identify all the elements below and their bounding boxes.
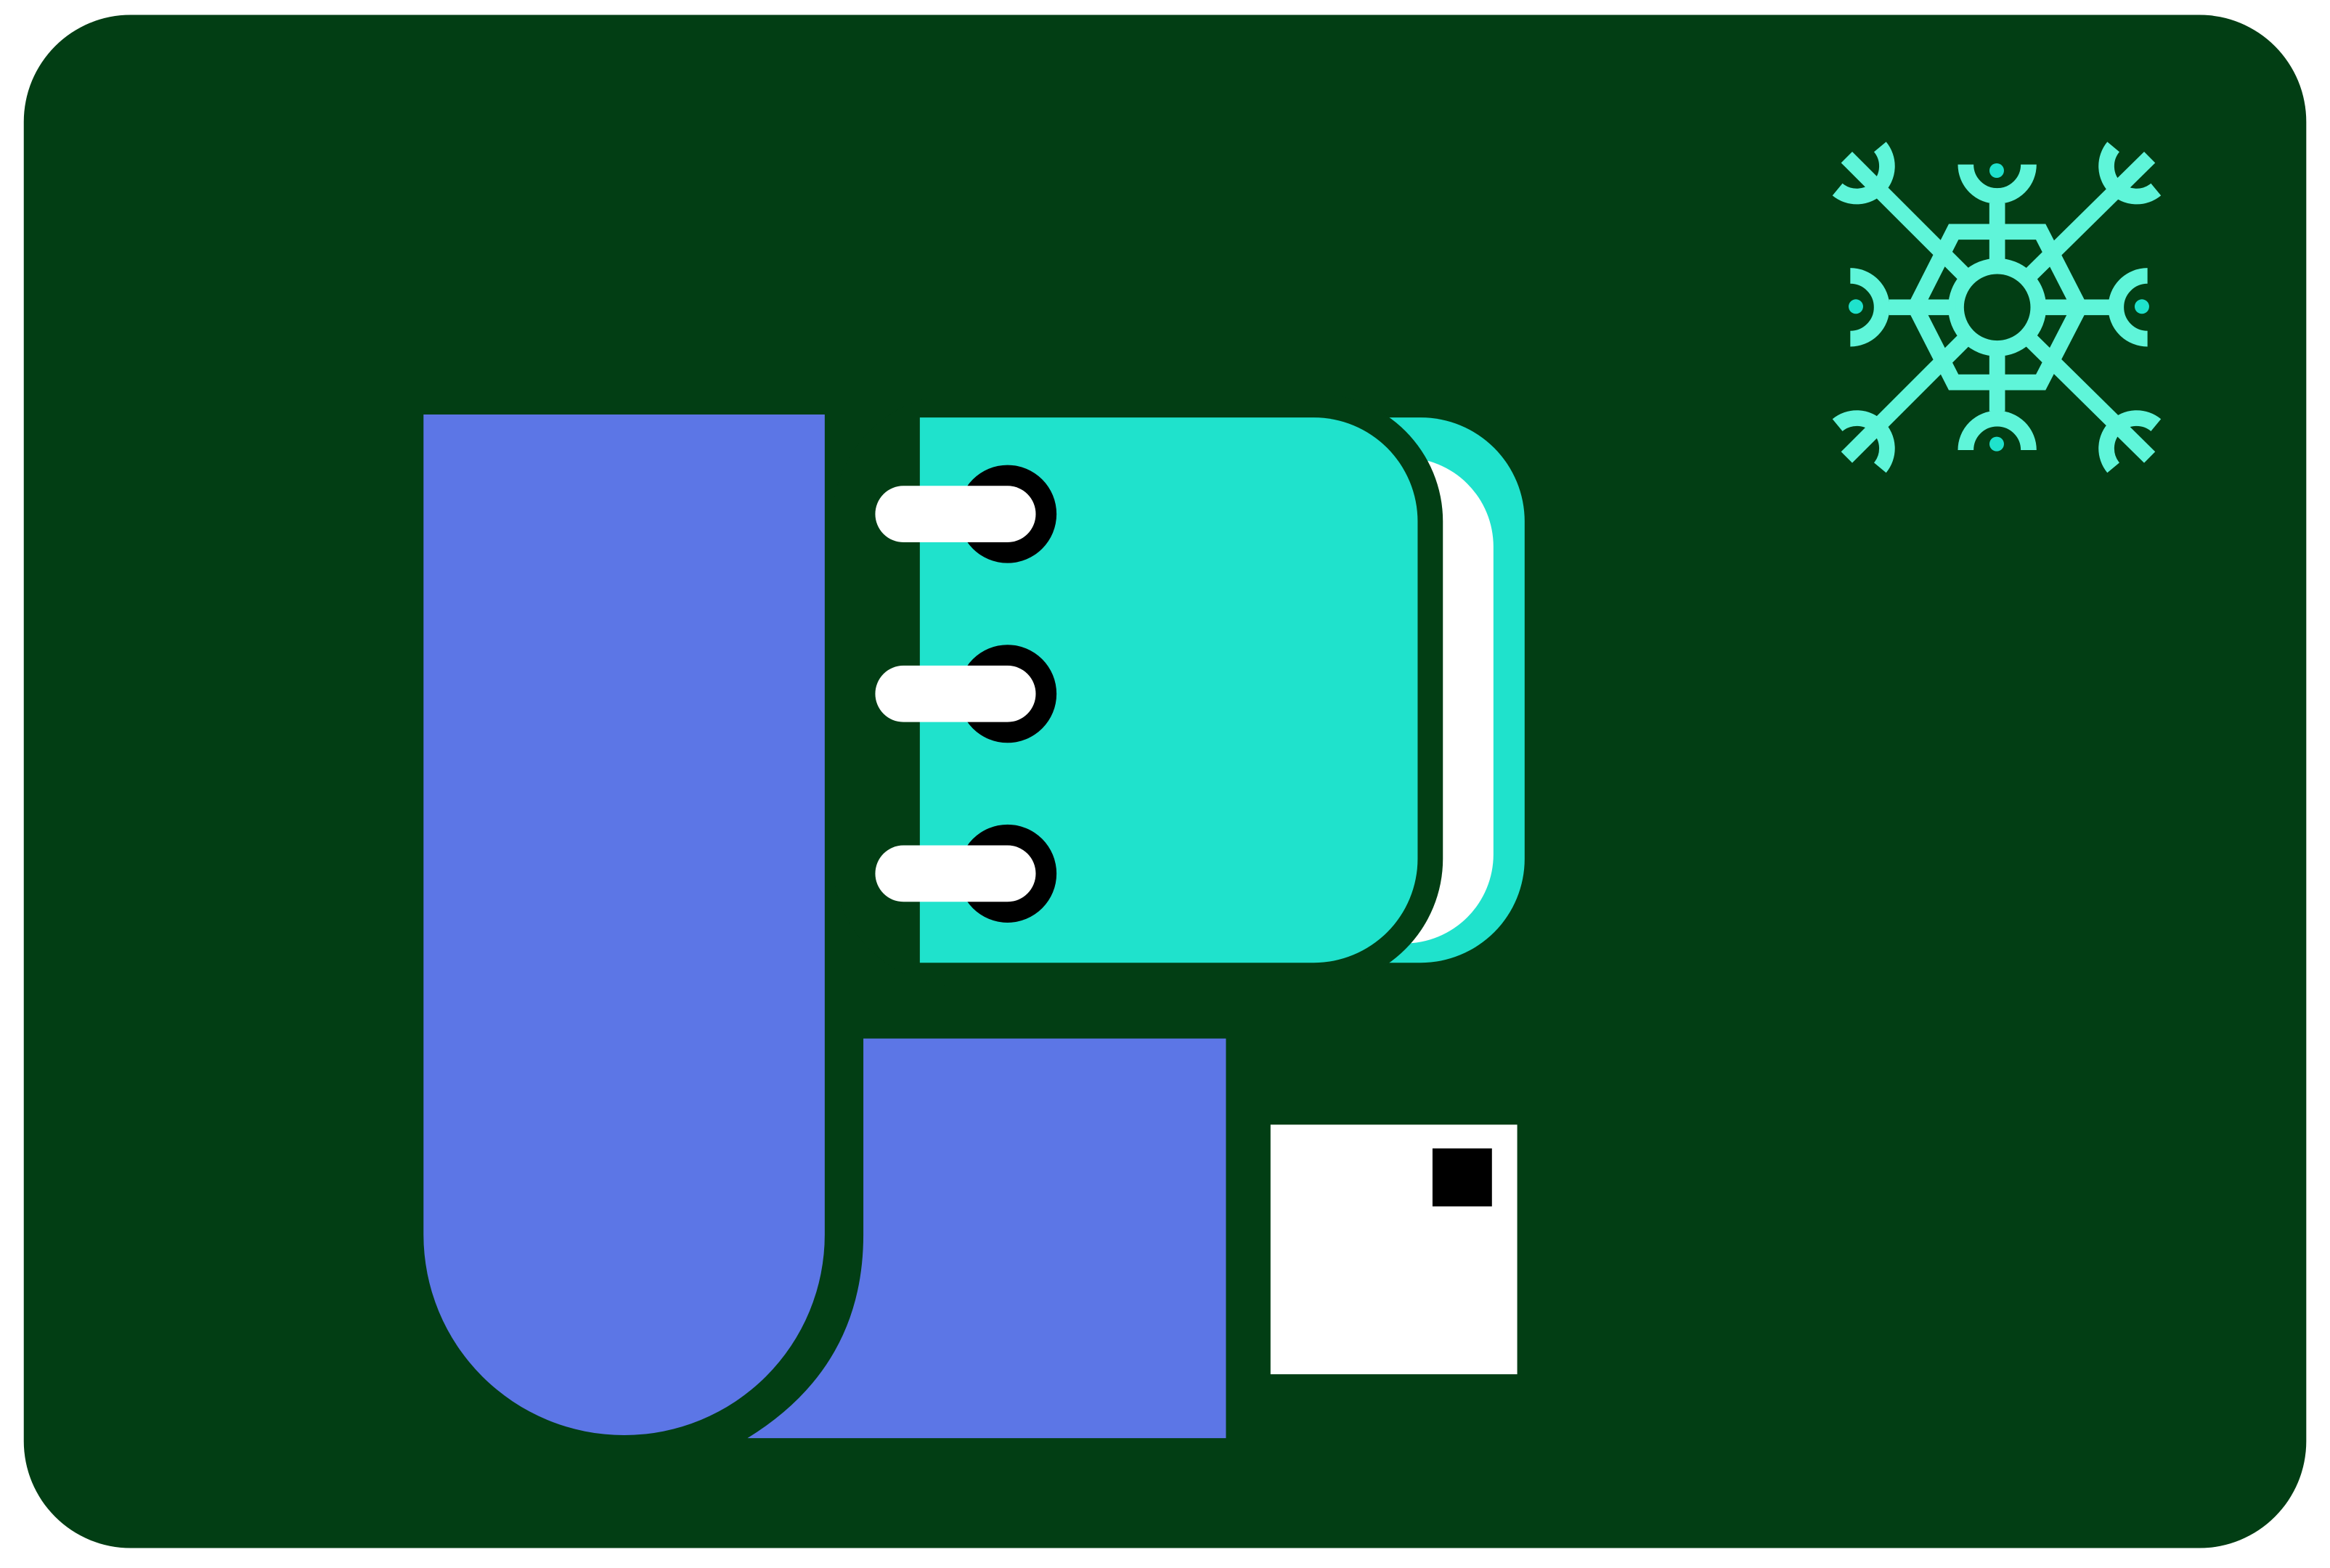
rings xyxy=(875,465,1056,923)
white square with black square xyxy=(1271,1124,1518,1374)
icon: snowflake xyxy=(1838,147,2156,467)
notebook xyxy=(832,393,1525,987)
blue block xyxy=(747,1039,1226,1438)
blue tall pill shape xyxy=(423,415,825,1435)
